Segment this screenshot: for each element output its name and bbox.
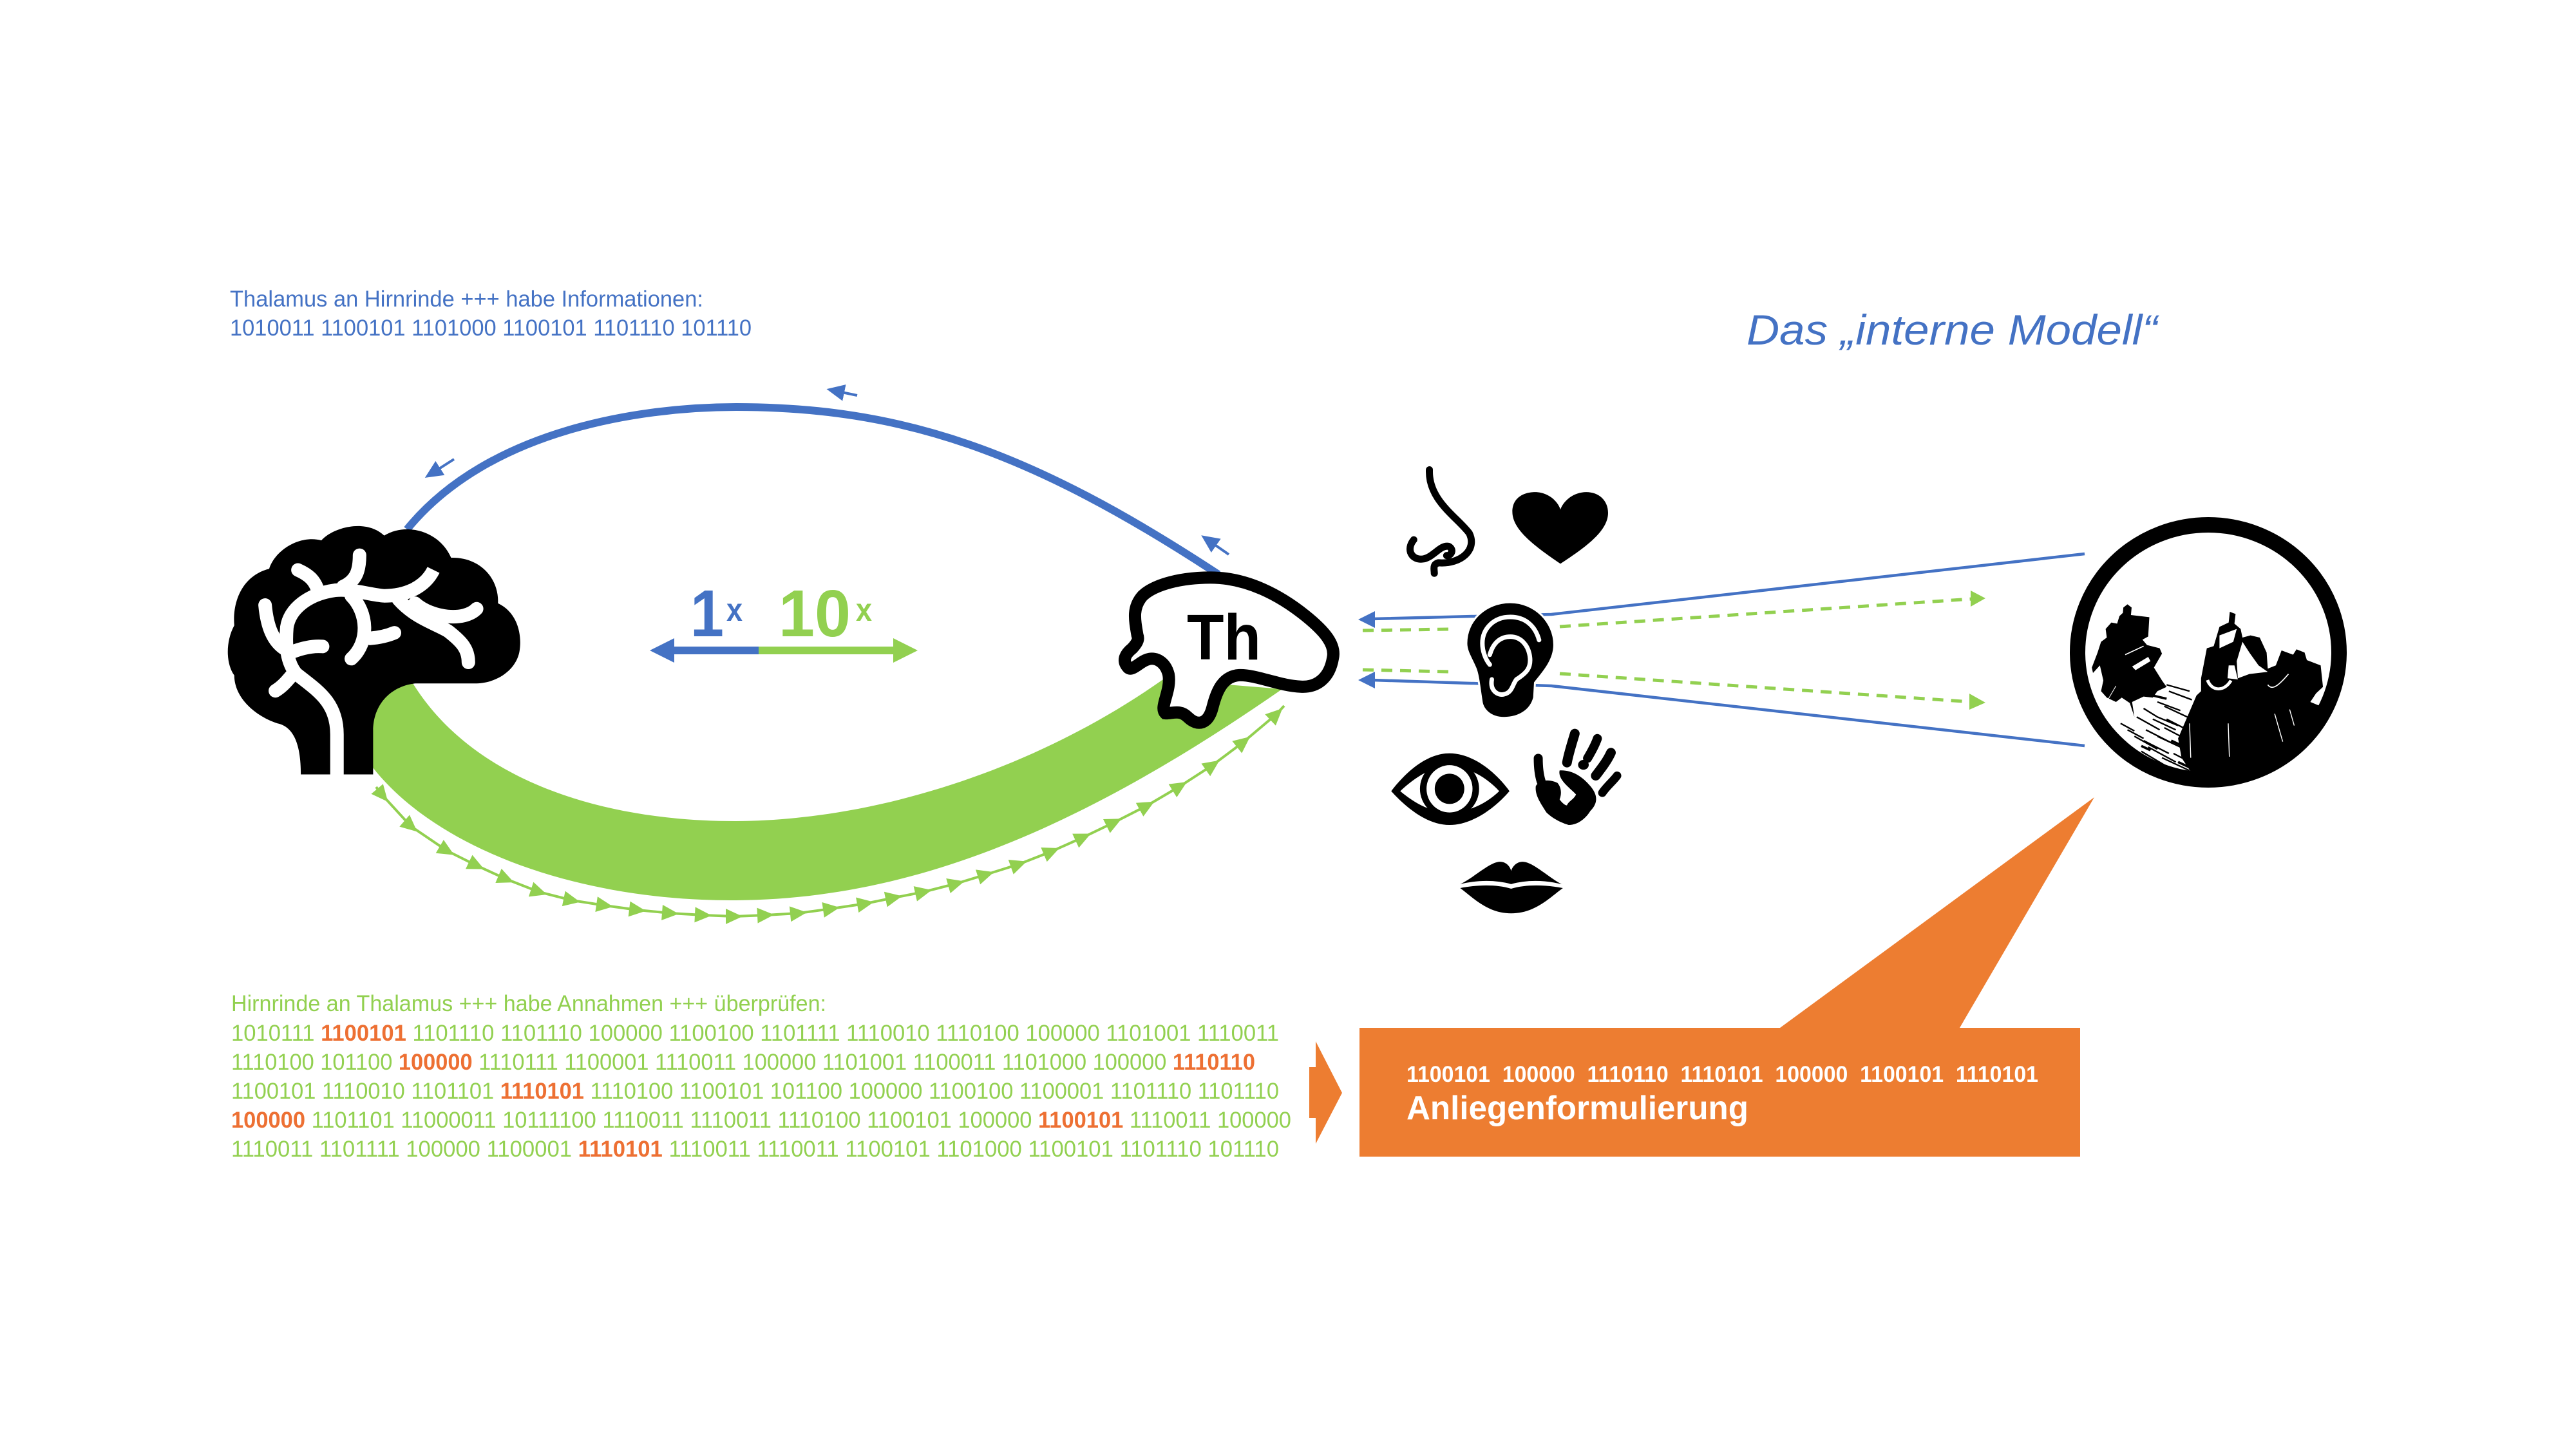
text: thalamus to cortex message: 1010011 1100101 1101000 1100101 1101110 101110 — [230, 316, 752, 341]
icon: eye — [1391, 753, 1510, 825]
callout: orange box with pointer to scene — [1359, 797, 2094, 1157]
text: cortex to thalamus message with binary lines: 1110011 1101111 100000 1100001 1110101 1110011 1110011 1100101 1101000 1100101 1101110 101110 — [231, 1137, 1279, 1162]
arrow: blue direction near thalamus — [1214, 544, 1229, 554]
arrow: blue direction near cortex — [438, 459, 454, 469]
icon: heart — [1512, 492, 1608, 564]
title: internal model: Das „interne Modell“ — [1747, 306, 2159, 354]
label: ratio 1x and 10x — [690, 576, 872, 650]
icon: thalamus shape with Th — [1124, 578, 1333, 723]
text: cortex to thalamus message with binary lines: 1010111 1100101 1101110 1101110 100000 1100100 1101111 1110010 1110100 100000 1101001 1110011 — [231, 1021, 1279, 1046]
text: thalamus to cortex message: Thalamus an Hirnrinde +++ habe Informationen: — [230, 287, 703, 312]
text: cortex to thalamus message with binary lines — [231, 991, 1291, 1162]
text: cortex to thalamus message with binary lines: 1110100 101100 100000 1110111 1100001 1110011 100000 1101001 1100011 1101000 100000 1110110 — [231, 1050, 1255, 1075]
arrow: lower green dashed line — [1363, 670, 1985, 710]
band: thick green cortex to thalamus pathway — [361, 679, 1282, 900]
arrow: upper green dashed line — [1363, 591, 1985, 630]
label: ratio 1x and 10x: x — [726, 592, 743, 628]
arrow: blue direction at top — [842, 392, 857, 395]
icon: brain — [228, 526, 520, 775]
text: cortex to thalamus message with binary lines: 100000 1101101 11000011 10111100 1110011 1110011 1110100 1100101 100000 1100101 1110011 100000 — [231, 1108, 1291, 1133]
illustration: ring with silhouette scene — [2078, 525, 2339, 780]
arrow: lower blue input line — [1358, 672, 2085, 746]
icon: thalamus shape with Th: Th — [1187, 601, 1261, 674]
icon: ear — [1466, 602, 1554, 718]
arc: blue thalamus to cortex pathway — [407, 407, 1218, 574]
arrow: upper blue input line — [1358, 554, 2085, 628]
icon: nose — [1410, 469, 1472, 573]
text: cortex to thalamus message with binary lines: Hirnrinde an Thalamus +++ habe Annahmen +++ überprüfen: — [231, 991, 826, 1016]
label: ratio 1x and 10x: 1 — [690, 576, 724, 650]
label: ratio 1x and 10x: x — [856, 592, 872, 628]
text: binary line in box: 1100101 100000 1110110 1110101 100000 1100101 1110101 — [1406, 1062, 2038, 1087]
arrow line: green chain of small arrows — [376, 706, 1284, 916]
text: cortex to thalamus message with binary lines: 1100101 1110010 1101101 1110101 1110100 1100101 101100 100000 1100100 1100001 1101110 1101110 — [231, 1079, 1279, 1104]
text: request formulation: Anliegenformulierung — [1406, 1090, 1748, 1127]
arrow: orange block arrow to box — [1309, 1041, 1342, 1144]
icon: lips — [1460, 862, 1563, 913]
text: thalamus to cortex message — [230, 287, 752, 341]
label: ratio 1x and 10x: 10 — [779, 576, 851, 650]
icon: hand print — [1536, 734, 1617, 825]
arrow: double arrow blue to green — [650, 638, 918, 663]
